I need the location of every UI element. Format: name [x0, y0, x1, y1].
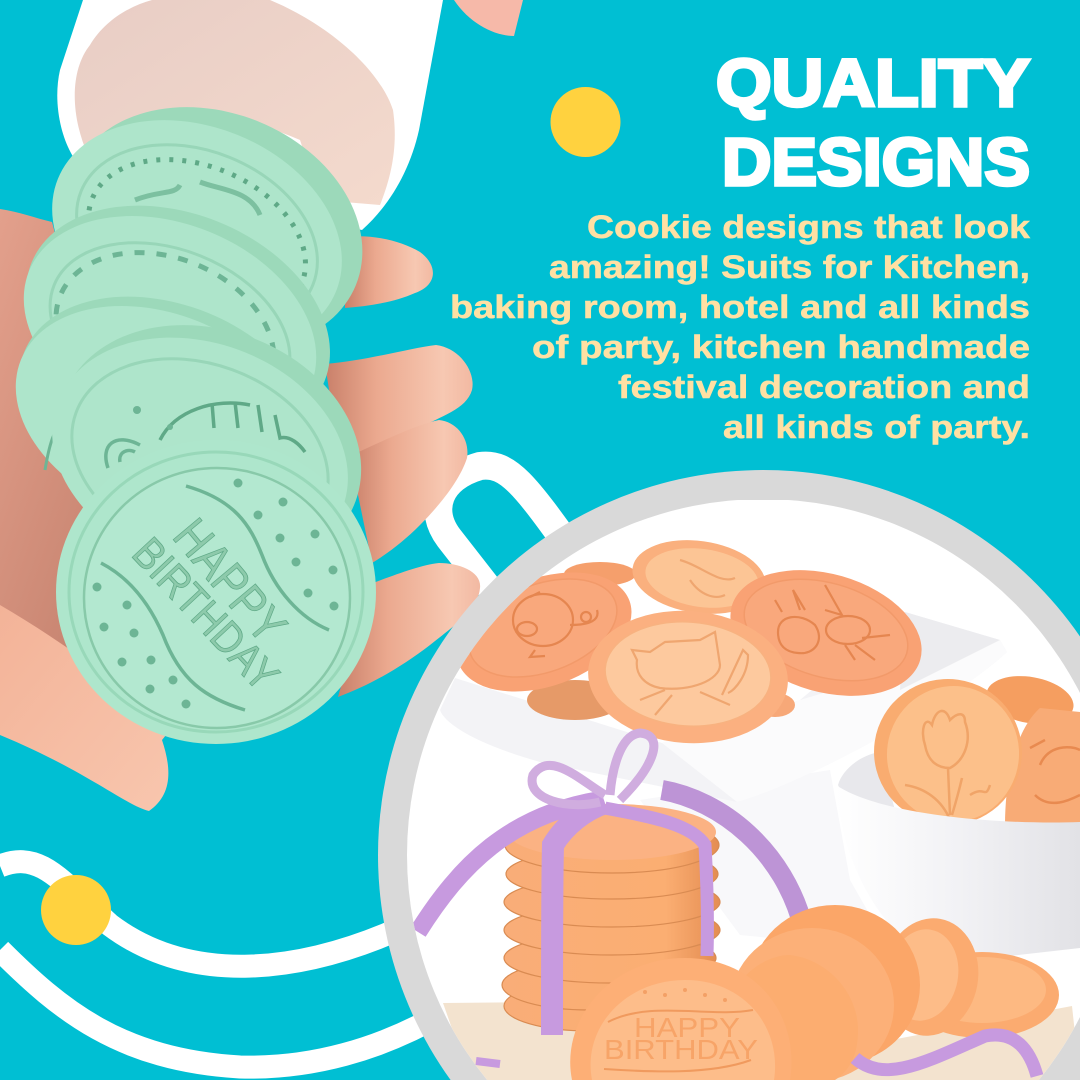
- hand: [0, 209, 480, 811]
- yellow dot top: [550, 87, 620, 157]
- stamp 2: [0, 163, 365, 481]
- title: [716, 46, 1030, 200]
- stamps stack: [0, 64, 399, 744]
- body text: all kinds of party.: [723, 409, 1030, 445]
- photo: cookies circle: [378, 470, 1080, 1080]
- happy birthday cookie text: HAPPY: [634, 1012, 740, 1043]
- cookie stack: [502, 817, 720, 1031]
- stamp 4: [19, 284, 396, 612]
- title: DESIGNS: [722, 125, 1030, 200]
- bowl interior: [838, 754, 894, 807]
- body text: amazing! Suits for Kitchen,: [549, 249, 1030, 285]
- white cup: [57, 0, 443, 230]
- cookie motifs: [513, 585, 890, 660]
- photo interior: [407, 500, 1080, 1080]
- grey ring: [378, 470, 1080, 1080]
- bowl cookies: [874, 676, 1080, 822]
- finger at top: [454, 0, 523, 36]
- happy birthday cookie text: [604, 988, 758, 1071]
- front cookies: [570, 905, 1059, 1080]
- decorative swoosh: top loop: [438, 466, 575, 588]
- happy birthday cookie text: BIRTHDAY: [604, 1034, 758, 1065]
- stamp 3: [0, 255, 351, 567]
- yellow dot bottom: [41, 875, 111, 945]
- body text: baking room, hotel and all kinds: [450, 289, 1030, 325]
- tulip motif: [905, 711, 990, 820]
- photo: hand holding stamps: [0, 0, 523, 811]
- purple ribbon: [418, 733, 707, 1035]
- body text: of party, kitchen handmade: [532, 329, 1030, 365]
- white tray: [440, 612, 1007, 802]
- stamp 5: happy birthday: HAPPY: [163, 508, 297, 654]
- bear motif: [1030, 740, 1080, 803]
- ribbon on table: [476, 1035, 1037, 1076]
- top cookie face: [508, 804, 716, 860]
- stamp 1: [17, 64, 399, 392]
- body text: Cookie designs that look: [587, 209, 1030, 245]
- body text: festival decoration and: [618, 369, 1030, 405]
- title: QUALITY: [716, 46, 1030, 121]
- stamp 5: happy birthday: BIRTHDAY: [123, 528, 288, 701]
- table: [443, 1002, 1080, 1080]
- back ribbon: [662, 790, 804, 930]
- tray cookies: [460, 540, 922, 744]
- decorative swoosh: bottom curves: [0, 862, 445, 1067]
- white bowl: [836, 785, 1080, 958]
- body text: [450, 209, 1030, 445]
- stamp 5: happy birthday: [56, 440, 376, 744]
